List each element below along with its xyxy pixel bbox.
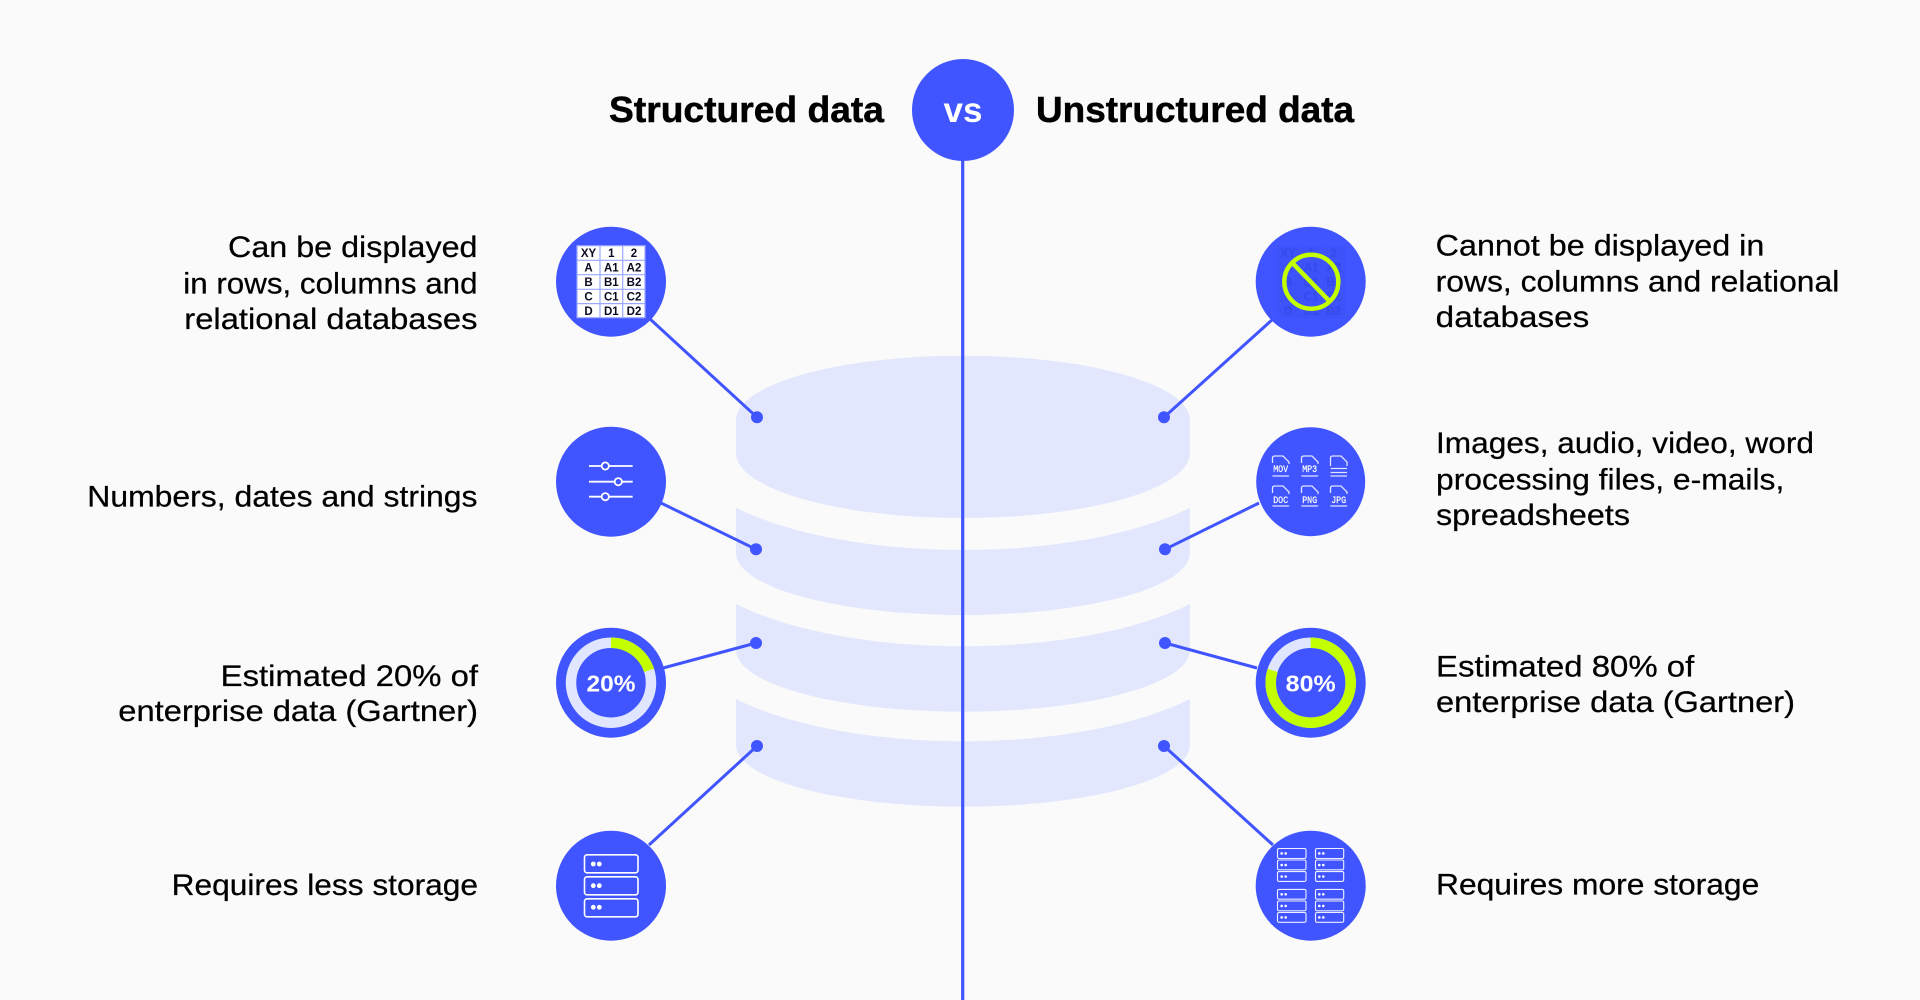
- icon: crossed-out table: B1: [1304, 277, 1319, 289]
- connector: [1159, 503, 1259, 555]
- text: estimated 80%: enterprise data (Gartner): [1436, 686, 1795, 719]
- icon: donut 20%: [556, 628, 666, 738]
- icon: crossed-out table: B: [1284, 277, 1292, 289]
- icon: donut 80%: 80%: [1286, 671, 1336, 697]
- icon: crossed-out table: A1: [1304, 262, 1319, 274]
- icon: file types: DOC: [1273, 496, 1288, 507]
- connector: [1159, 637, 1257, 668]
- icon: table: A1: [604, 262, 619, 274]
- icon: crossed-out table: A: [1284, 262, 1292, 274]
- text: images, audio, video: [1436, 427, 1814, 532]
- text: requires less storage: Requires less storage: [172, 869, 478, 902]
- icon: table: A: [584, 262, 593, 274]
- text: cannot be displayed: rows, columns and relational: [1436, 265, 1839, 298]
- icon: crossed-out table: D: [1284, 306, 1292, 318]
- right row 1: non-tabular: [1158, 227, 1839, 423]
- text: images, audio, video: Images, audio, video, word: [1436, 427, 1814, 460]
- text: estimated 20%: Estimated 20% of: [221, 660, 479, 693]
- icon: crossed-out table: D2: [1326, 306, 1341, 318]
- text: requires more storage: Requires more storage: [1436, 868, 1759, 901]
- icon: table: C: [584, 292, 593, 304]
- icon: table: D2: [627, 306, 641, 318]
- icon: crossed-out table: C1: [1304, 292, 1319, 304]
- icon: file types: JPG: [1331, 496, 1346, 507]
- text: can be displayed: [183, 231, 478, 336]
- text: estimated 20%: enterprise data (Gartner): [118, 695, 478, 728]
- text: can be displayed: relational databases: [184, 303, 478, 336]
- text: images, audio, video: spreadsheets: [1436, 499, 1630, 532]
- right row 2: file types: [1159, 427, 1814, 555]
- heading: Structured data: Structured data: [609, 89, 885, 130]
- text: can be displayed: in rows, columns and: [183, 267, 478, 300]
- heading: Unstructured data: Unstructured data: [1036, 89, 1355, 130]
- icon: file types: MOV: [1273, 465, 1288, 476]
- icon: file types: PNG: [1302, 496, 1317, 507]
- icon: table: B1: [604, 277, 619, 289]
- icon: crossed-out table: 2: [1330, 248, 1337, 260]
- icon: crossed-out table: XY: [1281, 248, 1296, 260]
- left row 2: data types: [87, 427, 762, 555]
- icon: file types: [1256, 427, 1365, 536]
- text: numbers, dates and strings: Numbers, dates and strings: [87, 481, 478, 514]
- connector: [661, 503, 762, 555]
- icon: crossed-out table: C2: [1326, 292, 1341, 304]
- text: estimated 80%: [1436, 650, 1795, 719]
- icon: table: D1: [604, 306, 619, 318]
- text: estimated 80%: Estimated 80% of: [1436, 650, 1695, 683]
- right row 4: more storage: [1158, 740, 1759, 941]
- icon: crossed-out table: B2: [1326, 277, 1341, 289]
- icon: server stack: [556, 831, 666, 941]
- icon: table: 1: [608, 248, 615, 260]
- icon: table: XY: [581, 248, 596, 260]
- icon: file types: MP3: [1302, 465, 1317, 476]
- icon: many server stacks: [1256, 831, 1366, 941]
- icon: crossed-out table: A2: [1326, 262, 1341, 274]
- icon: donut 80%: [1256, 628, 1366, 738]
- text: cannot be displayed: Cannot be displayed in: [1436, 229, 1764, 262]
- header row: [609, 59, 1355, 161]
- connector: [1158, 319, 1273, 423]
- left row 4: less storage: [172, 740, 763, 941]
- icon: crossed-out table: [1256, 227, 1366, 337]
- icon: table: B2: [627, 277, 641, 289]
- icon: table: C2: [627, 292, 641, 304]
- connector: [663, 637, 762, 668]
- left row 1: tabular: [183, 227, 763, 423]
- left row 3: 20 percent: [118, 628, 762, 738]
- icon: table: C1: [604, 292, 619, 304]
- icon: donut 20%: 20%: [586, 671, 636, 697]
- icon: crossed-out table: C: [1284, 292, 1292, 304]
- database cylinder: [736, 356, 1190, 807]
- connector: [1158, 740, 1273, 845]
- icon: crossed-out table: 1: [1308, 248, 1315, 260]
- icon: table: 2: [631, 248, 637, 260]
- text: can be displayed: Can be displayed: [228, 231, 478, 264]
- icon: crossed-out table: D1: [1304, 306, 1319, 318]
- connector: [650, 319, 763, 423]
- connector: [649, 740, 763, 845]
- text: cannot be displayed: databases: [1436, 301, 1589, 334]
- icon: table: B: [584, 277, 593, 289]
- right row 3: 80 percent: [1159, 628, 1795, 738]
- icon: table: [556, 227, 666, 337]
- central divider line: [961, 110, 964, 1000]
- icon: table: D: [584, 306, 593, 318]
- vs badge: [912, 59, 1014, 161]
- vs badge: vs: [944, 91, 982, 130]
- icon: sliders: [556, 427, 666, 537]
- text: cannot be displayed: [1436, 229, 1839, 334]
- text: images, audio, video: processing files, e-mails,: [1436, 463, 1784, 496]
- icon: table: A2: [627, 262, 641, 274]
- text: estimated 20%: [118, 660, 479, 728]
